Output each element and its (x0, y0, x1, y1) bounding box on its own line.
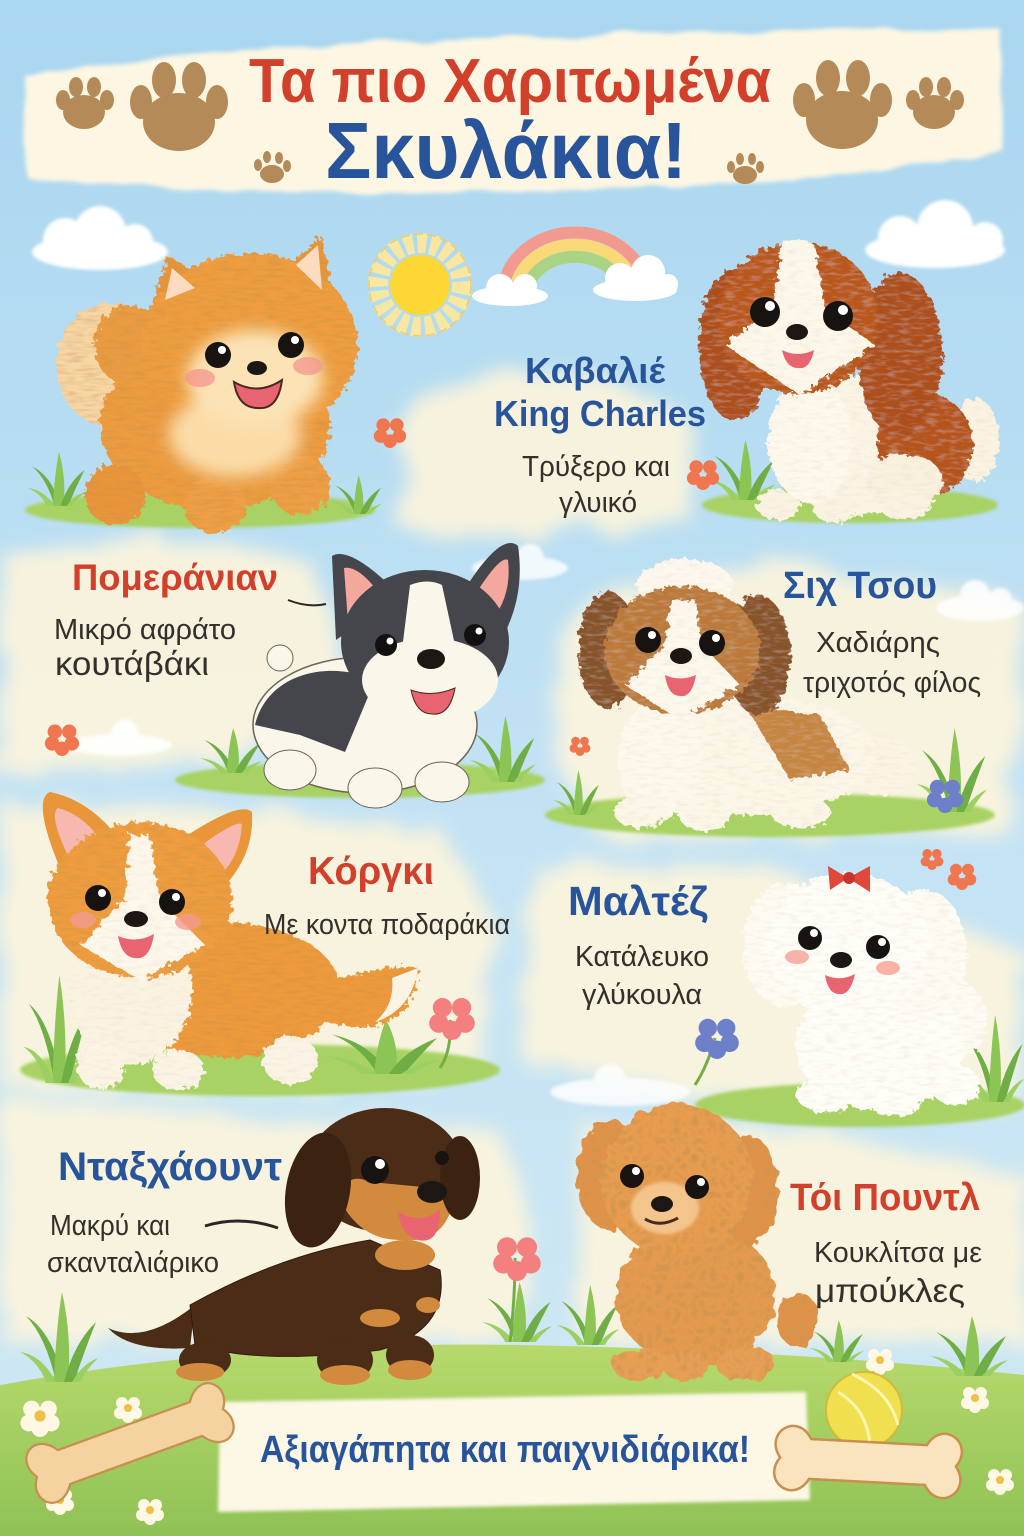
grass tufts (20, 440, 1024, 1382)
text: Toy Poodle label (790, 1177, 982, 1309)
title line 1: Τα πιο Χαριτωμένα (249, 47, 771, 116)
decorative clouds (32, 200, 1024, 1106)
footer banner (218, 1392, 810, 1512)
text: Maltese label (568, 878, 709, 1011)
icon: bone left (22, 1379, 238, 1507)
background: cream paint patches (0, 371, 1024, 1340)
footer text: Αξιαγάπητα και παιχνιδιάρικα! (260, 1429, 750, 1471)
icon: bone right (773, 1425, 963, 1499)
text: Cavalier King Charles label: Τρύξερο και (522, 451, 670, 483)
icon: sun (369, 234, 471, 336)
text: Cavalier King Charles label: γλυικό (559, 487, 637, 519)
text: Toy Poodle label: μπούκλες (815, 1272, 965, 1309)
text: Cavalier King Charles label (494, 350, 706, 519)
text: Cavalier King Charles label: King Charles (494, 393, 706, 434)
title line 2: Σκυλάκια! (325, 106, 687, 195)
text: Toy Poodle label: Τόι Πουντλ (790, 1177, 980, 1219)
text: Shih Tzu label (783, 565, 981, 699)
text: Shih Tzu label: τριχοτός φίλος (803, 667, 981, 699)
text: Dachshund label: Νταξχάουντ (58, 1145, 282, 1189)
dog: Shih Tzu (578, 559, 916, 831)
icon: paw prints right (727, 60, 964, 184)
text: Cavalier King Charles label: Καβαλιέ (525, 350, 666, 391)
icon: rainbow (472, 233, 678, 306)
text: Shih Tzu label: Σιχ Τσου (783, 565, 937, 607)
grass patches under dogs (20, 487, 1024, 1127)
text: Corgi label: Κόργκι (308, 850, 434, 893)
text: Shih Tzu label: Χαδιάρης (816, 627, 940, 659)
title banner (24, 28, 1003, 195)
text: Pomeranian label: Πομεράνιαν (72, 557, 278, 598)
dog: French Bulldog (253, 543, 520, 808)
text: Corgi label: Με κοντα ποδαράκια (264, 909, 510, 941)
dog: Toy Poodle (576, 1104, 818, 1381)
text: Pomeranian label (54, 557, 278, 682)
icon: yellow ball (826, 1372, 902, 1448)
text: Maltese label: Μαλτέζ (568, 878, 708, 924)
text: Toy Poodle label: Κουκλίτσα με (814, 1237, 982, 1269)
text: Pomeranian label: Μικρό αφράτο (54, 614, 236, 646)
dog: Dachshund (108, 1108, 480, 1385)
dog: Maltese (743, 866, 987, 1116)
text: Maltese label: γλύκουλα (582, 979, 702, 1011)
text: Dachshund label: σκανταλιάρικο (47, 1247, 219, 1279)
text: Pomeranian label: κουτάβάκι (55, 645, 209, 682)
text: Corgi label (264, 850, 510, 941)
dog: Corgi (43, 792, 418, 1090)
icon: paw prints left (56, 62, 291, 183)
text: Maltese label: Κατάλευκο (575, 941, 709, 973)
dog: Pomeranian (56, 235, 358, 533)
flowers (45, 418, 976, 1342)
text: Dachshund label (47, 1145, 282, 1279)
text: Dachshund label: Μακρύ και (50, 1210, 170, 1242)
dog: Cavalier King Charles (699, 238, 999, 523)
pointer strokes (205, 600, 326, 1228)
meadow ground (0, 1344, 1024, 1536)
